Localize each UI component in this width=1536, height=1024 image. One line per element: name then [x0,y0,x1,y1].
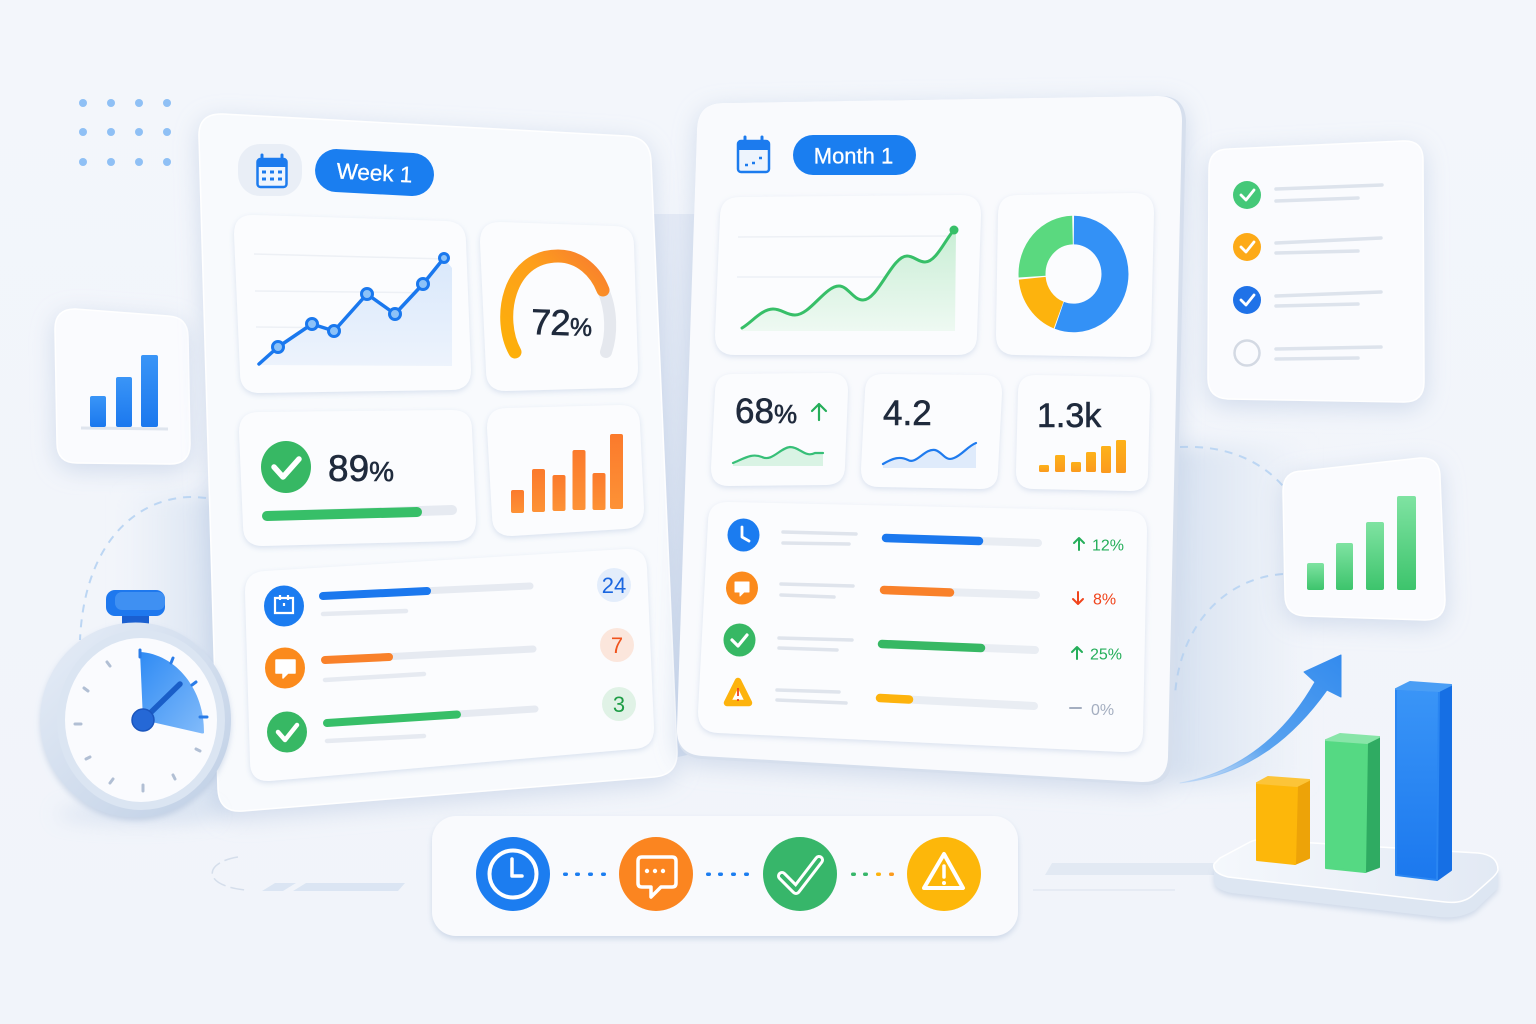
elapsed sector [140,652,204,734]
card: 4.2 stat: 4.2 [883,394,932,433]
green bar [1326,734,1379,872]
clock ticks [75,662,200,791]
backdrop between panels [120,214,1310,815]
row: comments: 8% [1093,592,1116,608]
card: green area chart [715,195,981,355]
card: 4.2 stat [861,374,1002,489]
card: donut chart [996,193,1154,357]
decorative ground marks left [212,857,405,891]
card: 89% progress: 89% [328,448,394,489]
stopwatch hand [132,684,180,731]
row: time [728,518,1124,554]
card: 72% gauge [480,222,638,391]
panel: checklist card [1208,141,1424,402]
row 2 [265,628,634,688]
podium base [1214,840,1498,917]
icon: green check [261,441,311,493]
card: activity list [245,549,654,781]
yellow bar [1257,777,1309,864]
card: 89% progress [239,410,476,546]
row 3: 3 [613,692,625,717]
icon: check [763,837,837,911]
card: 1.3k stat: 1.3k [1037,397,1102,435]
icon: calendar [738,137,769,172]
card: 68% stat [711,373,848,486]
panel: small bar chart card [55,309,190,464]
card: metrics list [698,502,1147,752]
row: completed [724,624,1122,664]
card: 1.3k stat [1016,375,1150,491]
panel: Week 1 dashboard [199,114,677,811]
panel: green bar chart card [1283,458,1445,620]
row 1: 24 [602,573,626,598]
check item orange [1233,233,1381,261]
check item empty [1234,340,1381,366]
dot grid decoration [79,99,171,166]
connector dots mixed [851,872,894,876]
connector dots blue [706,872,749,876]
panel: Month 1 dashboard [677,96,1186,785]
card: orange bars [487,405,644,536]
connector dots blue [563,872,606,876]
mini blue bars [81,355,168,429]
month pill: Month 1 [814,144,893,168]
icon: speech bubble [619,837,693,911]
row 2: 7 [611,633,623,658]
blue bar [1396,682,1451,880]
row: time: 12% [1092,538,1124,554]
row 1 [264,568,631,626]
decorative ground marks right [1033,863,1220,890]
check item green [1233,181,1382,209]
week pill [314,148,435,197]
stopwatch [40,590,231,822]
week pill: Week 1 [336,159,413,187]
dashed connector arcs [80,447,1283,695]
3D podium bar chart [1214,682,1498,917]
check item blue [1233,286,1381,314]
row 3 [267,687,636,752]
row: warning: 0% [1091,702,1114,719]
icon chip: calendar [238,144,302,196]
row: warning [727,681,1114,719]
icon: warning [907,837,981,911]
month pill [793,135,916,175]
card: line chart [234,215,471,393]
card: 72% gauge: 72% [530,301,593,344]
row: completed: 25% [1090,646,1122,664]
growth arrow [1180,655,1341,783]
status icon bar [432,816,1018,936]
icon: clock [476,837,550,911]
card: 68% stat: 68% [735,392,797,431]
row: comments [726,572,1116,608]
stopwatch button [106,590,165,627]
